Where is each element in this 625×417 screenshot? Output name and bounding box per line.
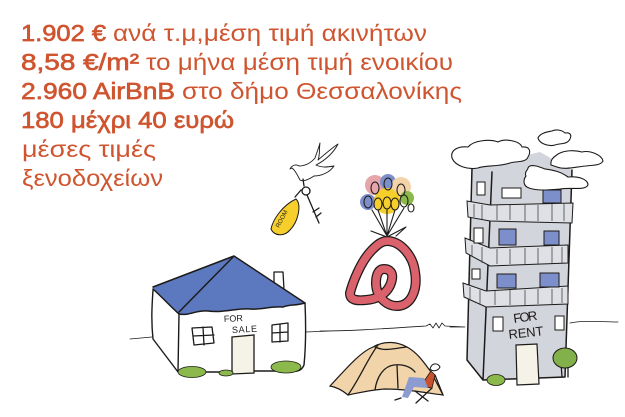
icon: balloons with airbnb logo [350,174,416,306]
bush [487,374,505,386]
tent door and seams [348,345,415,395]
airbnb logo pink stroke [350,241,416,306]
house walls [153,290,305,373]
line: property price: ανά τ.μ,μέση τιμή ακινήτων [113,20,427,46]
sign: for rent [508,308,544,342]
tree [553,348,577,377]
chimney [274,272,284,290]
sign: for rent: RENT [508,323,544,342]
sign: for rent: FOR [512,308,538,326]
clouds [452,130,603,190]
ground lines [130,321,618,339]
sign: for sale: FOR [224,313,244,324]
right window [272,323,288,342]
line: rent price [21,49,453,75]
left window [192,327,214,345]
balloons colour [360,174,414,214]
illustration: apartment building for rent [452,130,603,386]
building outline [467,168,572,380]
building body [467,152,572,380]
balloon outlines and strings [364,178,414,237]
white windows [472,182,564,331]
line: property price: 1.902 € [21,20,106,46]
line: rent price: 8,58 €/m² [21,49,139,75]
door [516,344,539,385]
roof outline [153,256,305,314]
line: AirBnB count [21,78,462,104]
blue roof [153,256,305,314]
tag label: ROOM [275,210,290,229]
statistics text block [21,20,462,191]
balcony railing [470,204,564,305]
line: property price [21,20,427,46]
tent [330,342,443,395]
key tag [271,199,299,235]
line: AirBnB count: στο δήμο Θεσσαλονίκης [182,78,462,104]
dove [290,143,338,181]
door [232,335,254,374]
line: hotels: ξενοδοχείων [22,165,163,191]
icon: dove carrying key [271,143,338,235]
sign: for sale [224,313,257,335]
illustration: house for sale [152,256,306,378]
sign: for sale: SALE [232,324,257,335]
line: AirBnB count: 2.960 AirBnB [21,78,175,104]
line: rent price: το μήνα μέση τιμή ενοικίου [146,49,453,75]
key [295,179,321,223]
line: average prices: μέσες τιμές [22,136,156,162]
blue windows [497,190,561,288]
balconies [463,201,573,307]
bushes [178,361,301,378]
airbnb logo dark outline [350,241,416,306]
wall outlines [152,290,306,372]
line: hotel range: 180 μέχρι 40 ευρώ [21,107,234,133]
illustration: tent with camper [330,342,443,403]
camper [395,364,443,403]
